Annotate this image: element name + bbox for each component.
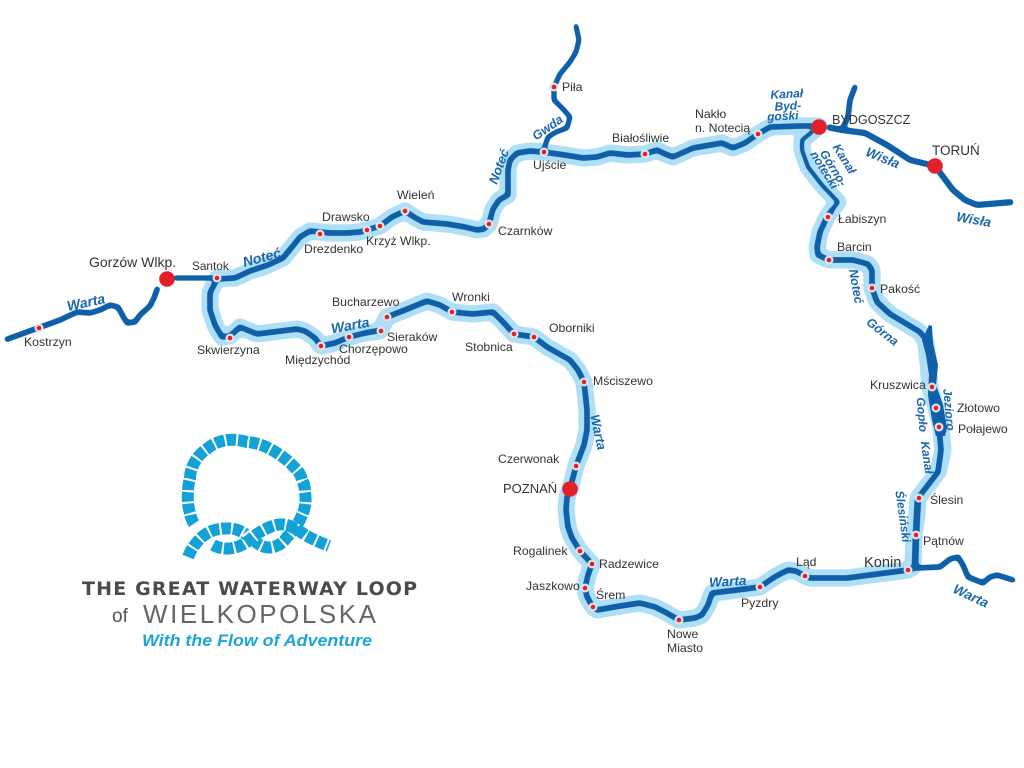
river label: Goplo: Gopło xyxy=(914,397,930,433)
logo word: of: of xyxy=(112,606,129,627)
label: Sierakow: Sieraków xyxy=(387,330,438,344)
label: Oborniki: Oborniki xyxy=(549,321,595,335)
label: Nowe Miasto: Miasto xyxy=(667,641,703,655)
river: Warta east xyxy=(915,557,1013,583)
logo tagline: With the Flow of Adventure xyxy=(142,631,372,650)
river label: Jezioro: Jezioro xyxy=(940,388,958,431)
label: Ujscie: Ujście xyxy=(533,158,567,172)
label: Santok: Santok xyxy=(192,259,229,273)
label: Wielen: Wieleń xyxy=(397,188,435,202)
rope strand: main loop xyxy=(188,440,306,557)
river label: Warta bottom: Warta xyxy=(709,573,747,590)
line: Byd-: Byd- xyxy=(774,98,801,114)
label: Barcin: Barcin xyxy=(837,240,872,254)
label: Stobnica: Stobnica xyxy=(465,340,513,354)
rope strand: crossing tail xyxy=(213,524,329,549)
label: Kostrzyn: Kostrzyn xyxy=(24,335,72,349)
label: Bydgoszcz: BYDGOSZCZ xyxy=(832,113,911,127)
river label: Gwda: Gwda xyxy=(530,112,566,143)
label: Patnow: Pątnów xyxy=(923,534,964,548)
label: Drawsko: Drawsko xyxy=(322,210,370,224)
label: Srem: Śrem xyxy=(596,587,625,602)
label: Gorzow: Gorzów Wlkp. xyxy=(89,254,176,270)
line: Kanal: Kanał xyxy=(830,141,859,177)
label: Wronki: Wronki xyxy=(452,290,490,304)
river: Warta Gorzow to Santok xyxy=(175,276,217,280)
rope strand: crossing gap xyxy=(246,532,258,541)
label: Radzewice: Radzewice xyxy=(599,557,659,571)
label: Krzyz: Krzyż Wlkp. xyxy=(366,234,431,248)
label: Torun: TORUŃ xyxy=(932,143,980,158)
label: Labiszyn: Łabiszyn xyxy=(838,212,887,226)
marker: major cities xyxy=(159,119,943,497)
river label: Kanal Gornonotecki xyxy=(807,141,859,192)
label: Msciszewo: Mściszewo xyxy=(593,374,653,388)
label: Czarnkow: Czarnków xyxy=(498,224,553,238)
label: Naklo: Nakło xyxy=(695,107,726,121)
label: Jaszkowo: Jaszkowo xyxy=(526,579,580,593)
river: Kanal Slesinski xyxy=(915,498,918,567)
label: Czerwonak: Czerwonak xyxy=(498,452,560,466)
river label: Notec south: Noteć xyxy=(846,268,866,305)
logo word: Wielkopolska: WIELKOPOLSKA xyxy=(143,599,377,629)
label: Pila: Piła xyxy=(562,80,583,94)
river: Warta west of Sierakow xyxy=(210,279,382,346)
label: Naklo: n. Notecią xyxy=(695,121,750,135)
label: Zlotowo: Złotowo xyxy=(957,401,1000,415)
label: Drezdenko: Drezdenko xyxy=(304,242,363,256)
river label: Warta east: Warta xyxy=(951,581,991,611)
river label: Kanal Bydgoski xyxy=(766,86,804,124)
line: Gorno-: Górno- xyxy=(817,147,850,189)
river label: Wisla lower: Wisła xyxy=(955,209,993,230)
label: Bucharzewo: Bucharzewo xyxy=(332,295,400,309)
rivers: dark blue channels xyxy=(5,26,1013,620)
line: Kanal: Kanał xyxy=(770,86,804,102)
label: Skwierzyna: Skwierzyna xyxy=(197,343,260,357)
marker: small towns red dots xyxy=(37,85,941,622)
label: Pyzdry: Pyzdry xyxy=(741,596,779,610)
river label: Kanal Slesinski upper: Kanał xyxy=(918,440,936,475)
label: Nowe Miasto: Nowe xyxy=(667,627,698,641)
river: Kanal Gornonotecki xyxy=(802,132,838,210)
label: Slesin: Ślesin xyxy=(930,492,964,507)
river label: Wisla upper: Wisła xyxy=(864,144,902,172)
label: Kruszwica: Kruszwica xyxy=(870,378,926,392)
icon: rope knot xyxy=(188,440,329,557)
river label: Notec north: Noteć xyxy=(486,146,512,186)
river label: Warta Miedzychod: Warta xyxy=(330,314,371,336)
river: Wisla xyxy=(827,127,1013,205)
river: Notec Gorna xyxy=(817,210,941,498)
label: Bialosliwie: Białośliwie xyxy=(612,131,669,145)
marker: small towns halos xyxy=(34,82,944,624)
label: Poznan: POZNAŃ xyxy=(503,481,557,496)
label: Lad: Ląd xyxy=(796,555,817,569)
river: Gwda xyxy=(543,26,579,152)
lake: Jezioro Goplo xyxy=(922,325,947,436)
river: Wisla north branch xyxy=(842,87,855,130)
river label: Warta Poznan: Warta xyxy=(587,413,609,451)
river label: Gorna: Górna xyxy=(864,315,901,349)
label: Pakosc: Pakość xyxy=(880,282,920,296)
river label: Notec west: Noteć xyxy=(241,244,283,270)
label: Polajewo: Połajewo xyxy=(958,422,1008,436)
river label: Warta west: Warta xyxy=(65,290,107,314)
river: Notec north section xyxy=(217,126,812,279)
town labels xyxy=(24,80,1008,655)
label: Miedzychod: Międzychód xyxy=(285,353,351,367)
line: goski: goski xyxy=(766,108,799,124)
route band: light blue waterway loop xyxy=(210,126,943,620)
river: Warta west xyxy=(5,287,158,340)
town markers xyxy=(34,82,944,624)
label: Konin: Konin xyxy=(864,555,901,571)
logo xyxy=(82,440,417,650)
river: Warta bottom xyxy=(387,301,915,620)
logo title: THE GREAT WATERWAY LOOP xyxy=(82,578,417,600)
label: Rogalinek: Rogalinek xyxy=(513,544,568,558)
line: notecki: notecki xyxy=(807,148,842,192)
river label: Slesinski: Ślesiński xyxy=(892,490,915,544)
label: Chorzepowo: Chorzępowo xyxy=(339,342,408,356)
river labels xyxy=(65,86,993,611)
